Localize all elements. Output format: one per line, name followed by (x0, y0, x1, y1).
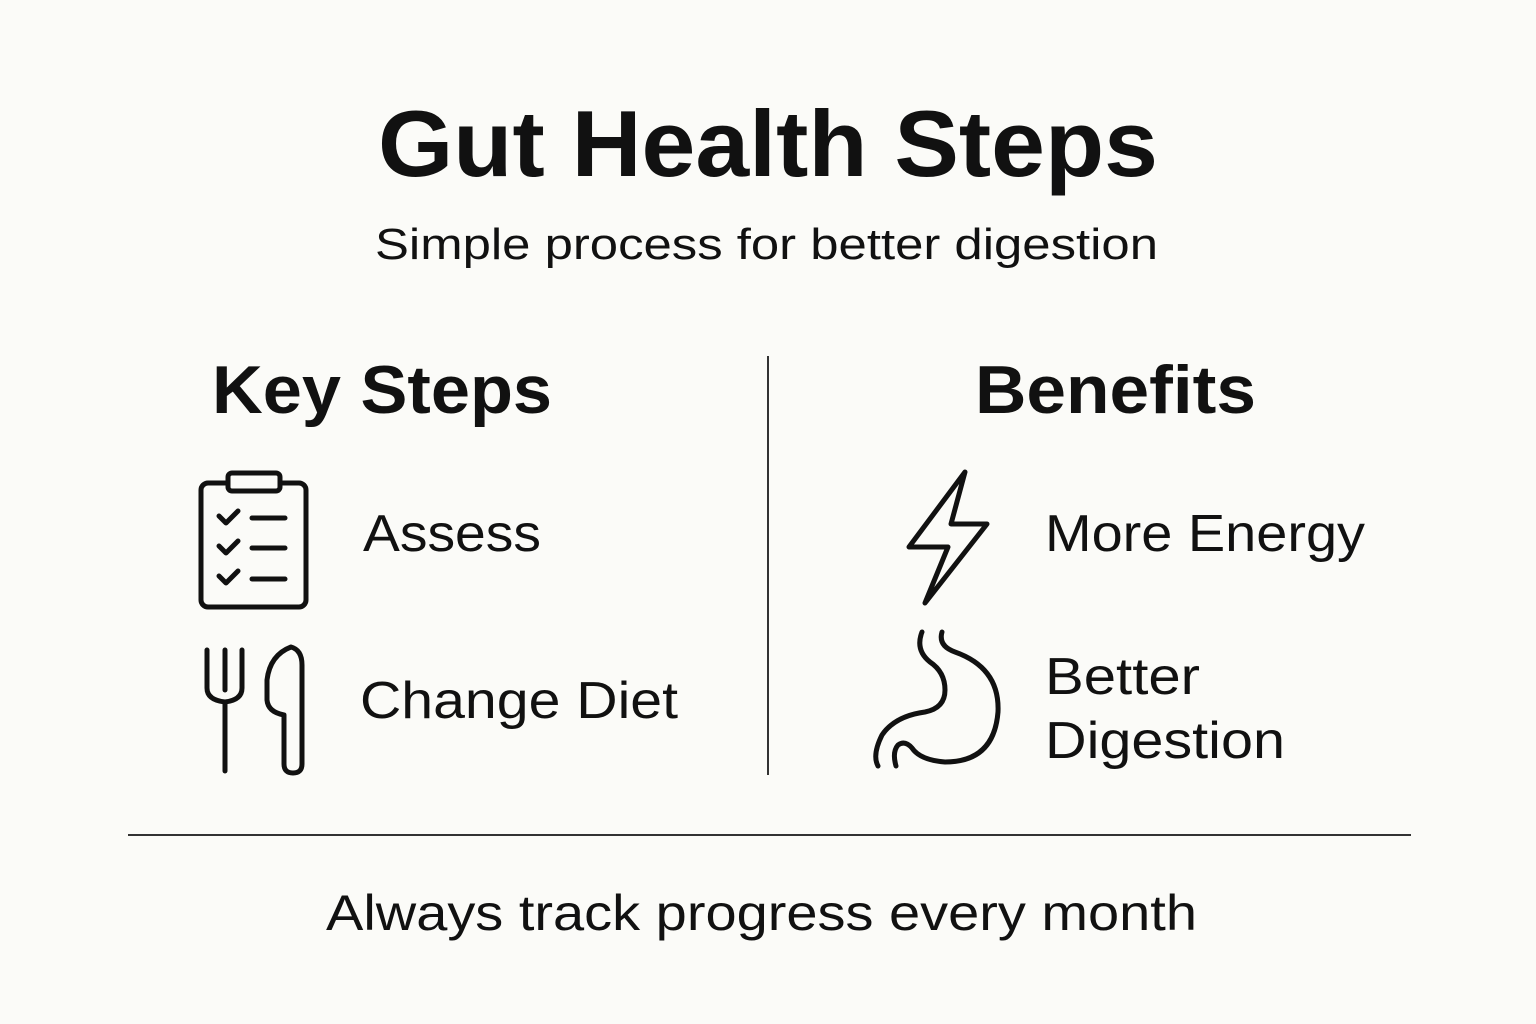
panel: benefits (876, 352, 1365, 770)
heading: benefits: Benefits (975, 352, 1256, 428)
subtitle: Simple process for better digestion (375, 220, 1158, 269)
title: Gut Health Steps (378, 91, 1158, 196)
panel: key steps (201, 352, 679, 773)
heading: key steps: Key Steps (212, 352, 552, 428)
text: change diet: Change Diet (360, 672, 679, 730)
icon: stomach (876, 632, 998, 766)
icon: fork and knife (207, 647, 302, 773)
text: better digestion: Digestion (1045, 712, 1285, 770)
divider vertical (767, 356, 769, 775)
text: more energy: More Energy (1045, 505, 1365, 563)
text: better digestion (1045, 648, 1285, 770)
footer note: Always track progress every month (326, 885, 1197, 941)
icon: lightning bolt (909, 472, 987, 603)
icon: clipboard (201, 473, 306, 607)
text: better digestion: Better (1045, 648, 1200, 706)
divider horizontal (128, 834, 1411, 836)
text: assess: Assess (363, 505, 541, 563)
